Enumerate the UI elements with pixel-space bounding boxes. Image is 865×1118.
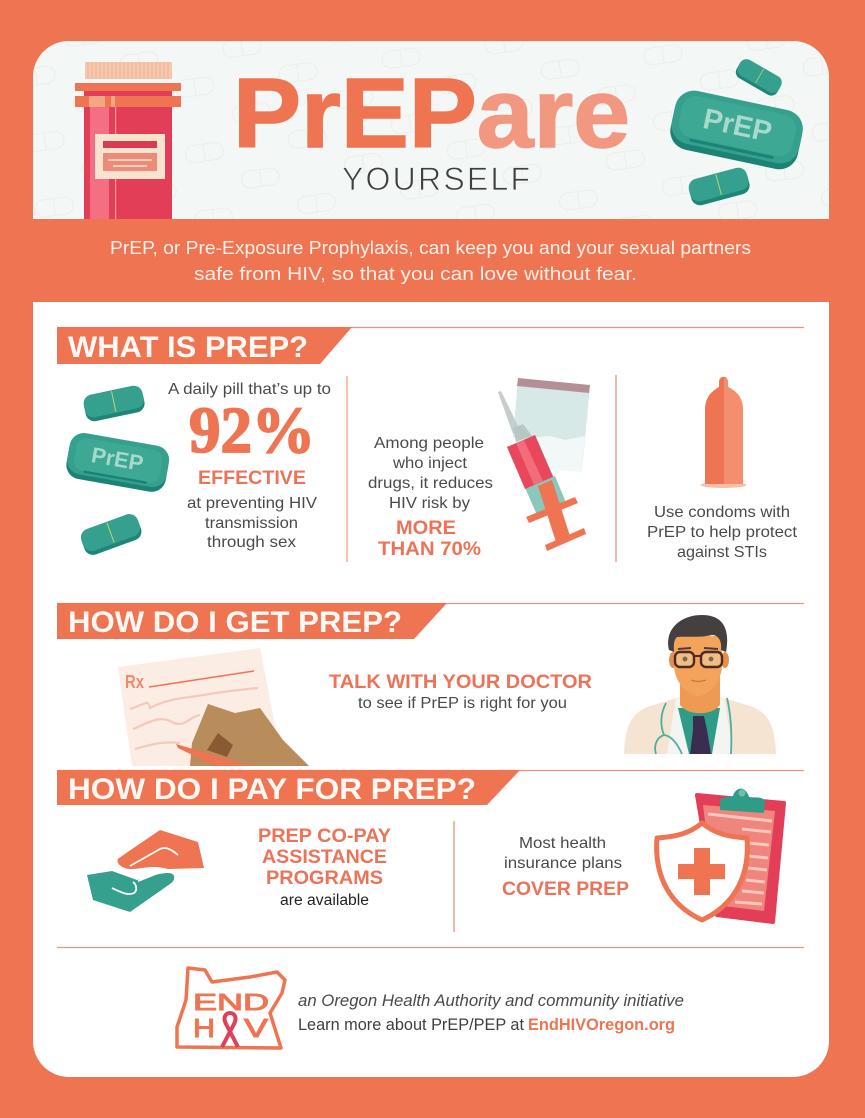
text: talk with your doctor: [329, 671, 592, 712]
icon: pill bottle: [75, 62, 181, 219]
footer text: Learn more about PrEP/PEP at: [298, 1016, 524, 1034]
text: insurance plans: [502, 835, 629, 900]
icon: prescription and hand: [118, 648, 309, 766]
panel: how do i pay for prep: [57, 770, 804, 932]
text: injection drugs risk: HIV risk by: [389, 495, 470, 512]
heading: how do i get prep: HOW DO I GET PREP?: [68, 606, 402, 639]
icon: small pill, header bottom: [687, 166, 752, 207]
text: 92 percent effective: [168, 381, 331, 551]
text: co-pay programs: are available: [280, 892, 369, 909]
intro text: safe from HIV, so that you can love without fear.: [194, 263, 637, 284]
text: injection drugs risk: THAN 70%: [378, 538, 481, 560]
logo: End HIV Oregon: END: [193, 989, 269, 1015]
footer text: an Oregon Health Authority and community initiative: [298, 992, 684, 1010]
icon: clipboard and shield: [657, 789, 784, 922]
text: 92 percent effective: EFFECTIVE: [198, 467, 306, 489]
text: talk with your doctor: to see if PrEP is right for you: [358, 695, 567, 712]
text: talk with your doctor: TALK WITH YOUR DOCTOR: [329, 671, 592, 693]
footer text: EndHIVOregon.org: [528, 1016, 675, 1034]
text: co-pay programs: PROGRAMS: [266, 867, 383, 889]
text: use condoms: Use condoms with: [654, 504, 790, 521]
text: use condoms: PrEP to help protect: [647, 524, 798, 541]
subtitle: YOURSELF: [342, 161, 530, 197]
heading: what is prep: [57, 327, 804, 364]
heading: what is prep: WHAT IS PREP?: [68, 331, 308, 364]
text: injection drugs risk: [368, 435, 493, 560]
text: co-pay programs: PREP CO-PAY: [258, 825, 391, 847]
text: co-pay programs: ASSISTANCE: [262, 846, 387, 868]
panel: how do i get prep: [57, 603, 804, 766]
panel: what is prep: [57, 327, 804, 562]
icon: helping hands: [87, 830, 204, 912]
text: use condoms: against STIs: [677, 544, 767, 561]
text: use condoms: [647, 504, 798, 561]
icon: small pill, header top: [733, 57, 784, 98]
icon: small pill, bottom: [78, 512, 144, 557]
intro text: [110, 237, 751, 284]
text: injection drugs risk: drugs, it reduces: [368, 475, 493, 492]
text: co-pay programs: [258, 825, 391, 909]
text: insurance plans: COVER PREP: [502, 878, 629, 900]
icon: bag and syringe: [498, 378, 590, 551]
text: injection drugs risk: Among people: [374, 435, 484, 452]
icon: doctor: [624, 615, 776, 754]
intro text: PrEP, or Pre-Exposure Prophylaxis, can keep you and your sexual partners: [110, 237, 751, 258]
text: 92 percent effective: A daily pill that’s up to: [168, 381, 331, 398]
text: 92 percent effective: 92%: [189, 394, 315, 467]
logo: End HIV Oregon: V: [244, 1013, 269, 1043]
text: insurance plans: insurance plans: [504, 855, 622, 872]
text: 92 percent effective: through sex: [207, 534, 296, 551]
footer text: [298, 992, 684, 1034]
icon: large PrEP pill: PrEP: [89, 442, 145, 476]
heading: how do i pay for prep: [57, 770, 804, 806]
icon: prescription and hand: Rx: [125, 672, 144, 692]
icon: condom: [700, 377, 746, 488]
logo: End HIV Oregon: H: [193, 1013, 215, 1043]
text: injection drugs risk: MORE: [396, 517, 456, 539]
title: PrEPare: [233, 58, 630, 168]
heading: how do i pay for prep: HOW DO I PAY FOR PREP?: [68, 773, 476, 806]
icon: large PrEP pill, header: [667, 87, 806, 173]
text: injection drugs risk: who inject: [392, 455, 468, 472]
text: 92 percent effective: at preventing HIV: [187, 495, 317, 512]
icon: large PrEP pill: [64, 431, 171, 494]
text: 92 percent effective: transmission: [205, 515, 298, 532]
icon: small pill, top: [82, 384, 146, 423]
logo: End HIV Oregon: [177, 968, 285, 1048]
text: insurance plans: Most health: [519, 835, 606, 852]
heading: how do i get prep: [57, 603, 804, 639]
icon: large PrEP pill, header: PrEP: [700, 103, 775, 149]
